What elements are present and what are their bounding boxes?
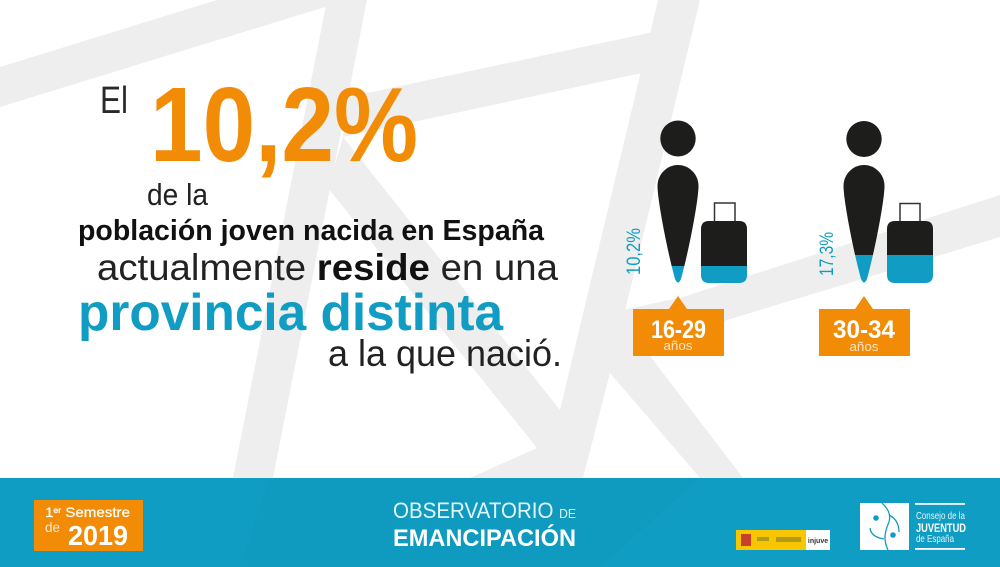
badge: 1er Semestre de 2019: er [53,506,61,515]
text: población joven nacida en España: población joven nacida en España [78,215,545,247]
icon: suitcase handle [900,204,920,222]
logo: Consejo de la Juventud de España: de España [916,533,954,545]
icon: suitcase [887,221,933,255]
logo: Consejo de la Juventud de España: Consejo de la [916,510,965,522]
logo: Consejo de la Juventud de España [860,503,966,550]
age tag: 30-34: años [850,339,879,354]
text: provincia distinta: provincia distinta [78,284,504,342]
icon: suitcase handle [714,203,735,222]
label: 17,3%: 17,3% [817,232,838,276]
figure: 30-34 person and suitcase [817,121,933,356]
icon: person head [846,121,882,157]
age tag: 16-29: 16-29 [651,316,706,344]
label: 10,2%: 10,2% [624,228,645,275]
badge: 1er Semestre de 2019: 2019 [68,520,128,551]
icon: person head [660,120,696,156]
badge: 1er Semestre de 2019: 1 [45,504,53,520]
age tag: 16-29: años [664,338,693,353]
heading: El: El [100,80,128,122]
logo: ministerio and injuve [736,530,830,550]
text: a la que nació: a la que nació. [328,333,562,374]
age tag: 16-29 [633,296,724,356]
age tag: 30-34 [819,296,910,356]
badge: 1er Semestre de 2019: Semestre [61,504,130,520]
badge: 1er Semestre de 2019: de [45,519,60,535]
text: de la: de la [147,177,209,212]
logo: ministerio and injuve: injuve [808,538,828,545]
logo: Observatorio de Emancipación [393,498,576,552]
age tag: 30-34: 30-34 [833,316,895,344]
figure: 16-29 person and suitcase [624,120,747,356]
icon: consejo mark [860,503,909,550]
logo: Consejo de la Juventud de España: JUVENTUD [916,523,966,535]
icon: suitcase filled part [701,266,747,283]
logo: Observatorio de Emancipación: EMANCIPACIÓN [393,524,576,552]
icon: person body [844,165,884,282]
icon: suitcase [701,221,747,266]
icon: person body [658,165,698,282]
heading: 10,2%: 10,2% [150,66,418,184]
footer band [0,478,1000,567]
text: actualmente reside en una: actualmente reside en una [97,247,558,288]
icon: suitcase filled part [887,255,933,283]
logo: Observatorio de Emancipación: OBSERVATORIO DE [393,498,576,523]
badge: 1er Semestre de 2019 [34,500,143,551]
